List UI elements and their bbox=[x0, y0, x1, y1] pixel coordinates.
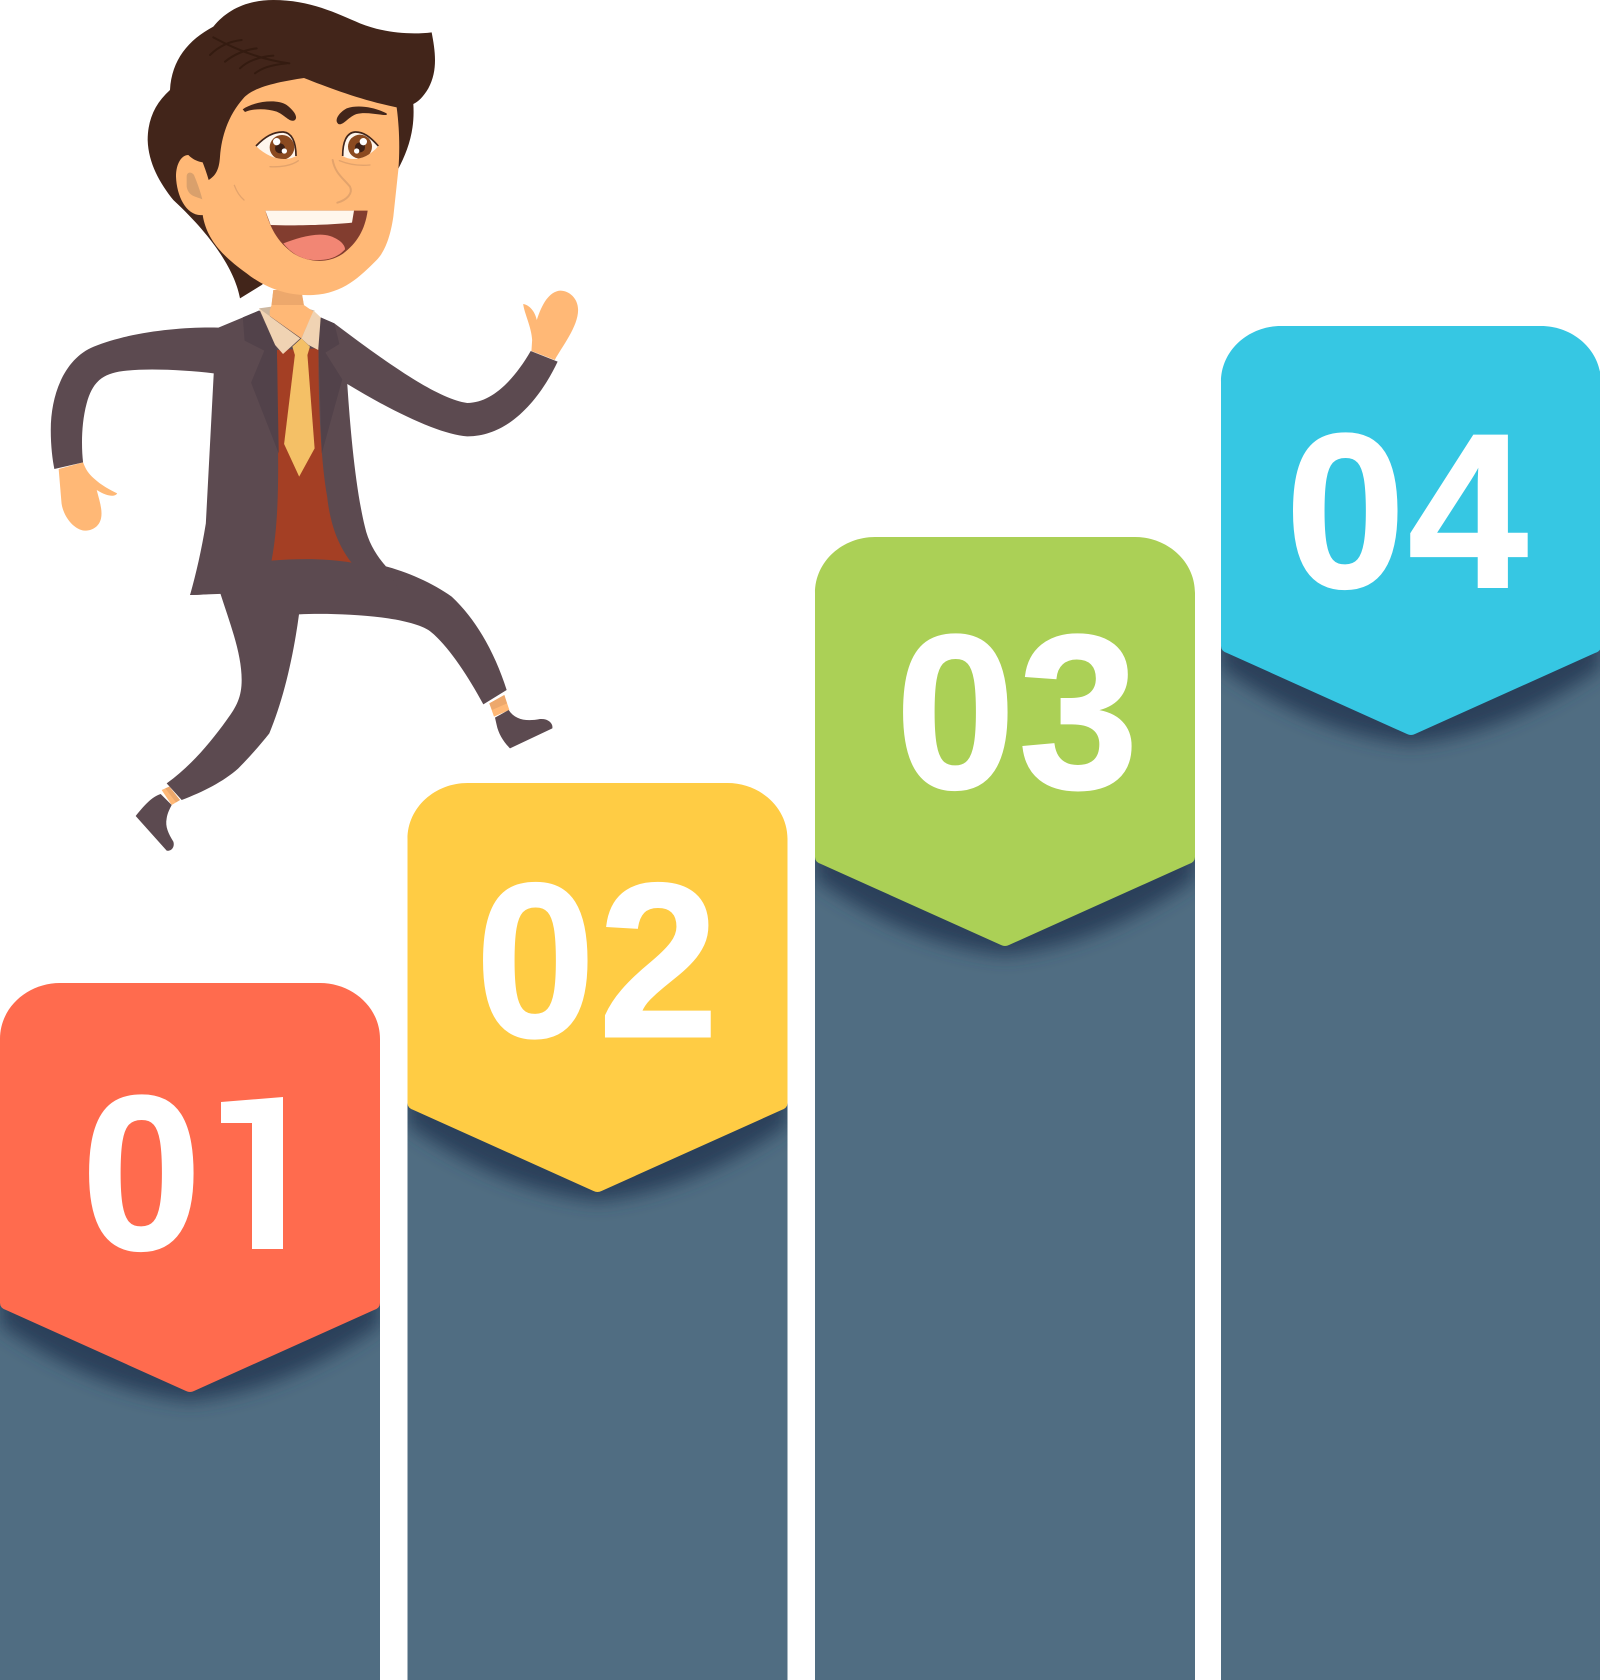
step 01 column bbox=[0, 983, 380, 1680]
torso, arms and hands bbox=[51, 290, 578, 595]
number 01: 1 bbox=[200, 1053, 320, 1295]
character: running businessman bbox=[51, 0, 578, 851]
step 03 column bbox=[815, 537, 1195, 1680]
step 04 column bbox=[1221, 326, 1600, 1680]
number 01: 0 bbox=[82, 1051, 201, 1296]
number 04: 04 bbox=[1285, 389, 1528, 634]
number 01 bbox=[89, 1094, 283, 1252]
step 02 column bbox=[408, 783, 788, 1680]
head bbox=[148, 0, 435, 298]
legs and shoes bbox=[136, 560, 552, 851]
number 02: 02 bbox=[475, 839, 718, 1084]
number 03: 03 bbox=[896, 590, 1138, 835]
